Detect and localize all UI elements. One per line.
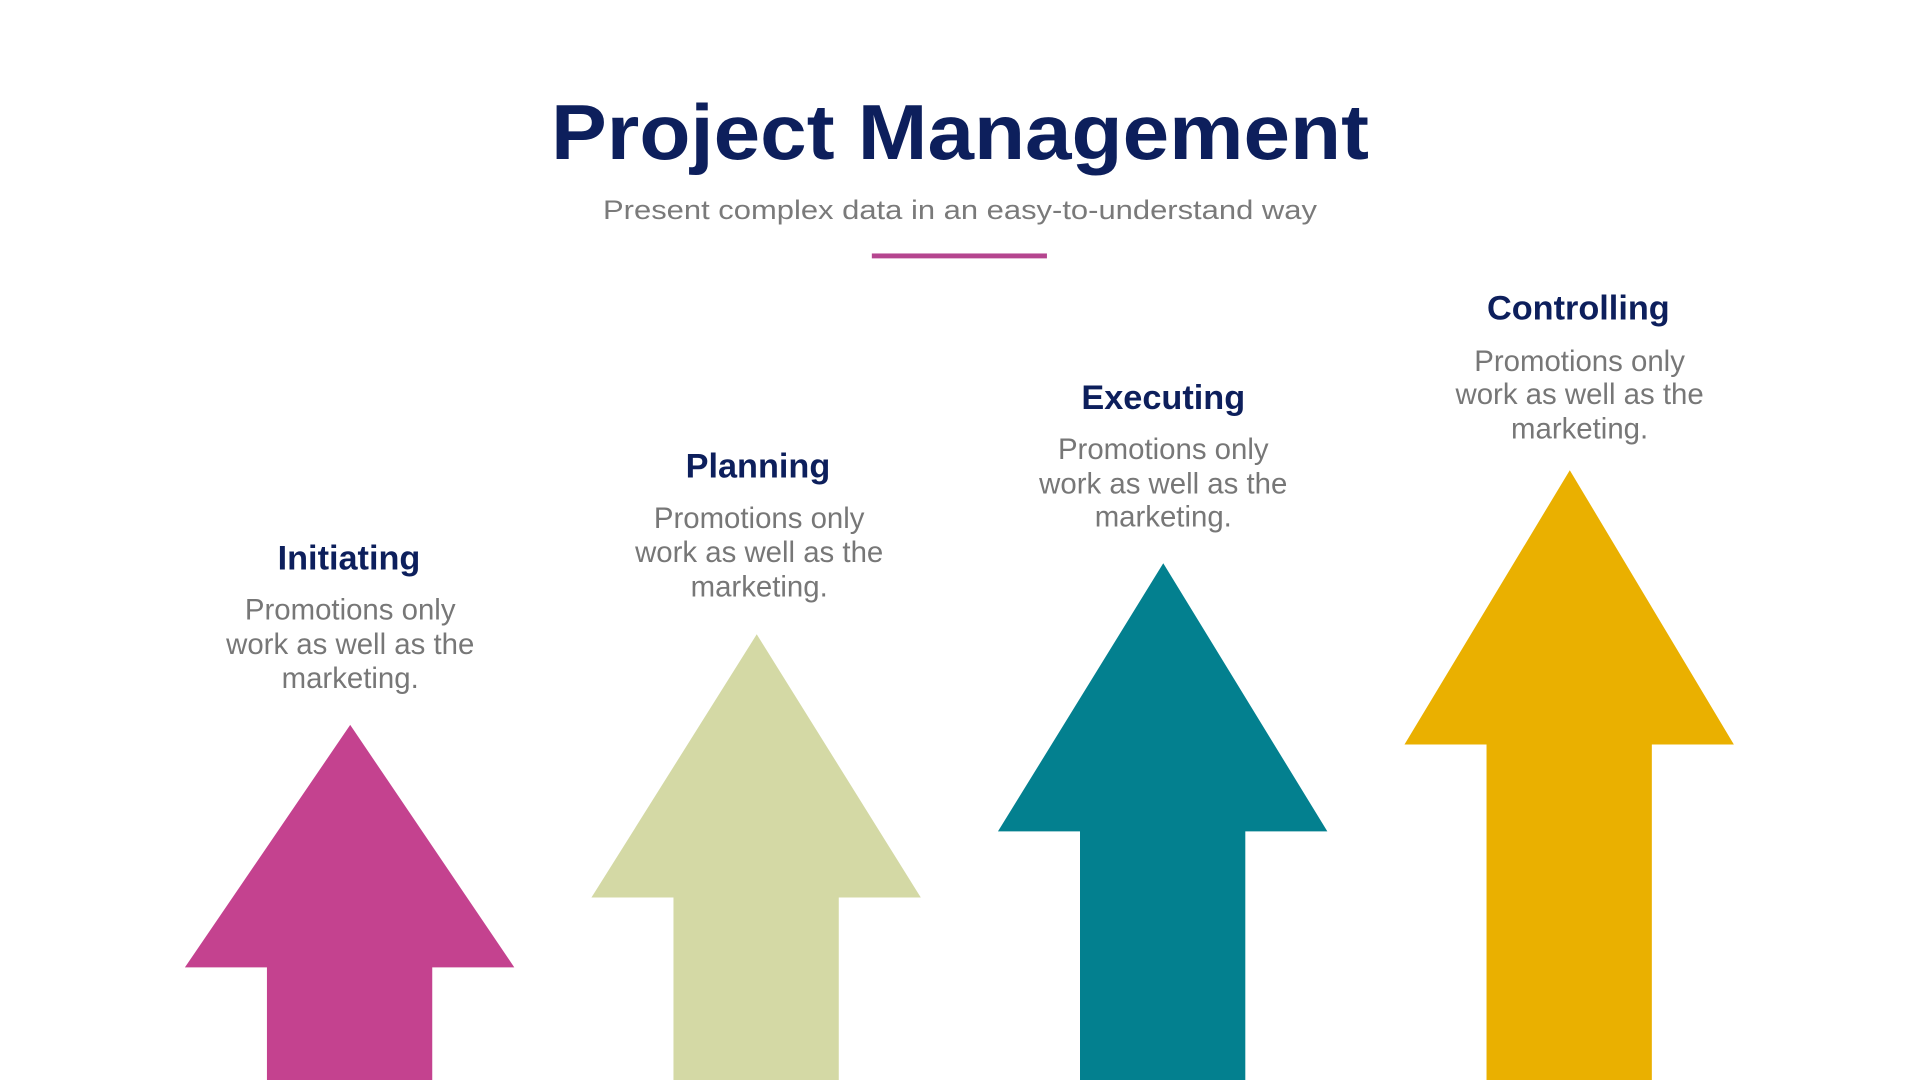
text block: controlling: work as well as the	[1455, 378, 1704, 411]
subtitle: Present complex data in an easy-to-understand way	[603, 195, 1318, 225]
text block: controlling: Controlling	[1487, 290, 1670, 328]
text block: initiating	[225, 539, 474, 695]
arrow: controlling	[1404, 470, 1734, 1080]
arrow: planning	[591, 634, 921, 1080]
text block: controlling: marketing.	[1511, 412, 1648, 445]
text block: initiating: Promotions only	[245, 594, 456, 627]
text block: initiating: work as well as the	[225, 628, 474, 661]
text block: executing: marketing.	[1095, 501, 1232, 534]
title: Project Management	[551, 88, 1369, 176]
text block: planning: marketing.	[691, 570, 828, 603]
text block: executing: Executing	[1081, 379, 1245, 417]
arrow: executing	[998, 563, 1327, 1080]
text block: executing	[1038, 379, 1287, 534]
text block: planning: work as well as the	[634, 536, 883, 569]
text block: controlling: Promotions only	[1474, 345, 1685, 378]
text block: planning: Planning	[686, 448, 830, 486]
text block: initiating: marketing.	[282, 662, 419, 695]
arrow: initiating	[185, 725, 514, 1080]
text block: controlling	[1455, 290, 1704, 445]
text block: initiating: Initiating	[278, 539, 420, 577]
text block: planning: Promotions only	[654, 502, 865, 535]
text block: executing: work as well as the	[1038, 467, 1287, 500]
text block: executing: Promotions only	[1058, 433, 1269, 466]
text block: planning	[634, 448, 883, 603]
accent line	[872, 253, 1047, 258]
